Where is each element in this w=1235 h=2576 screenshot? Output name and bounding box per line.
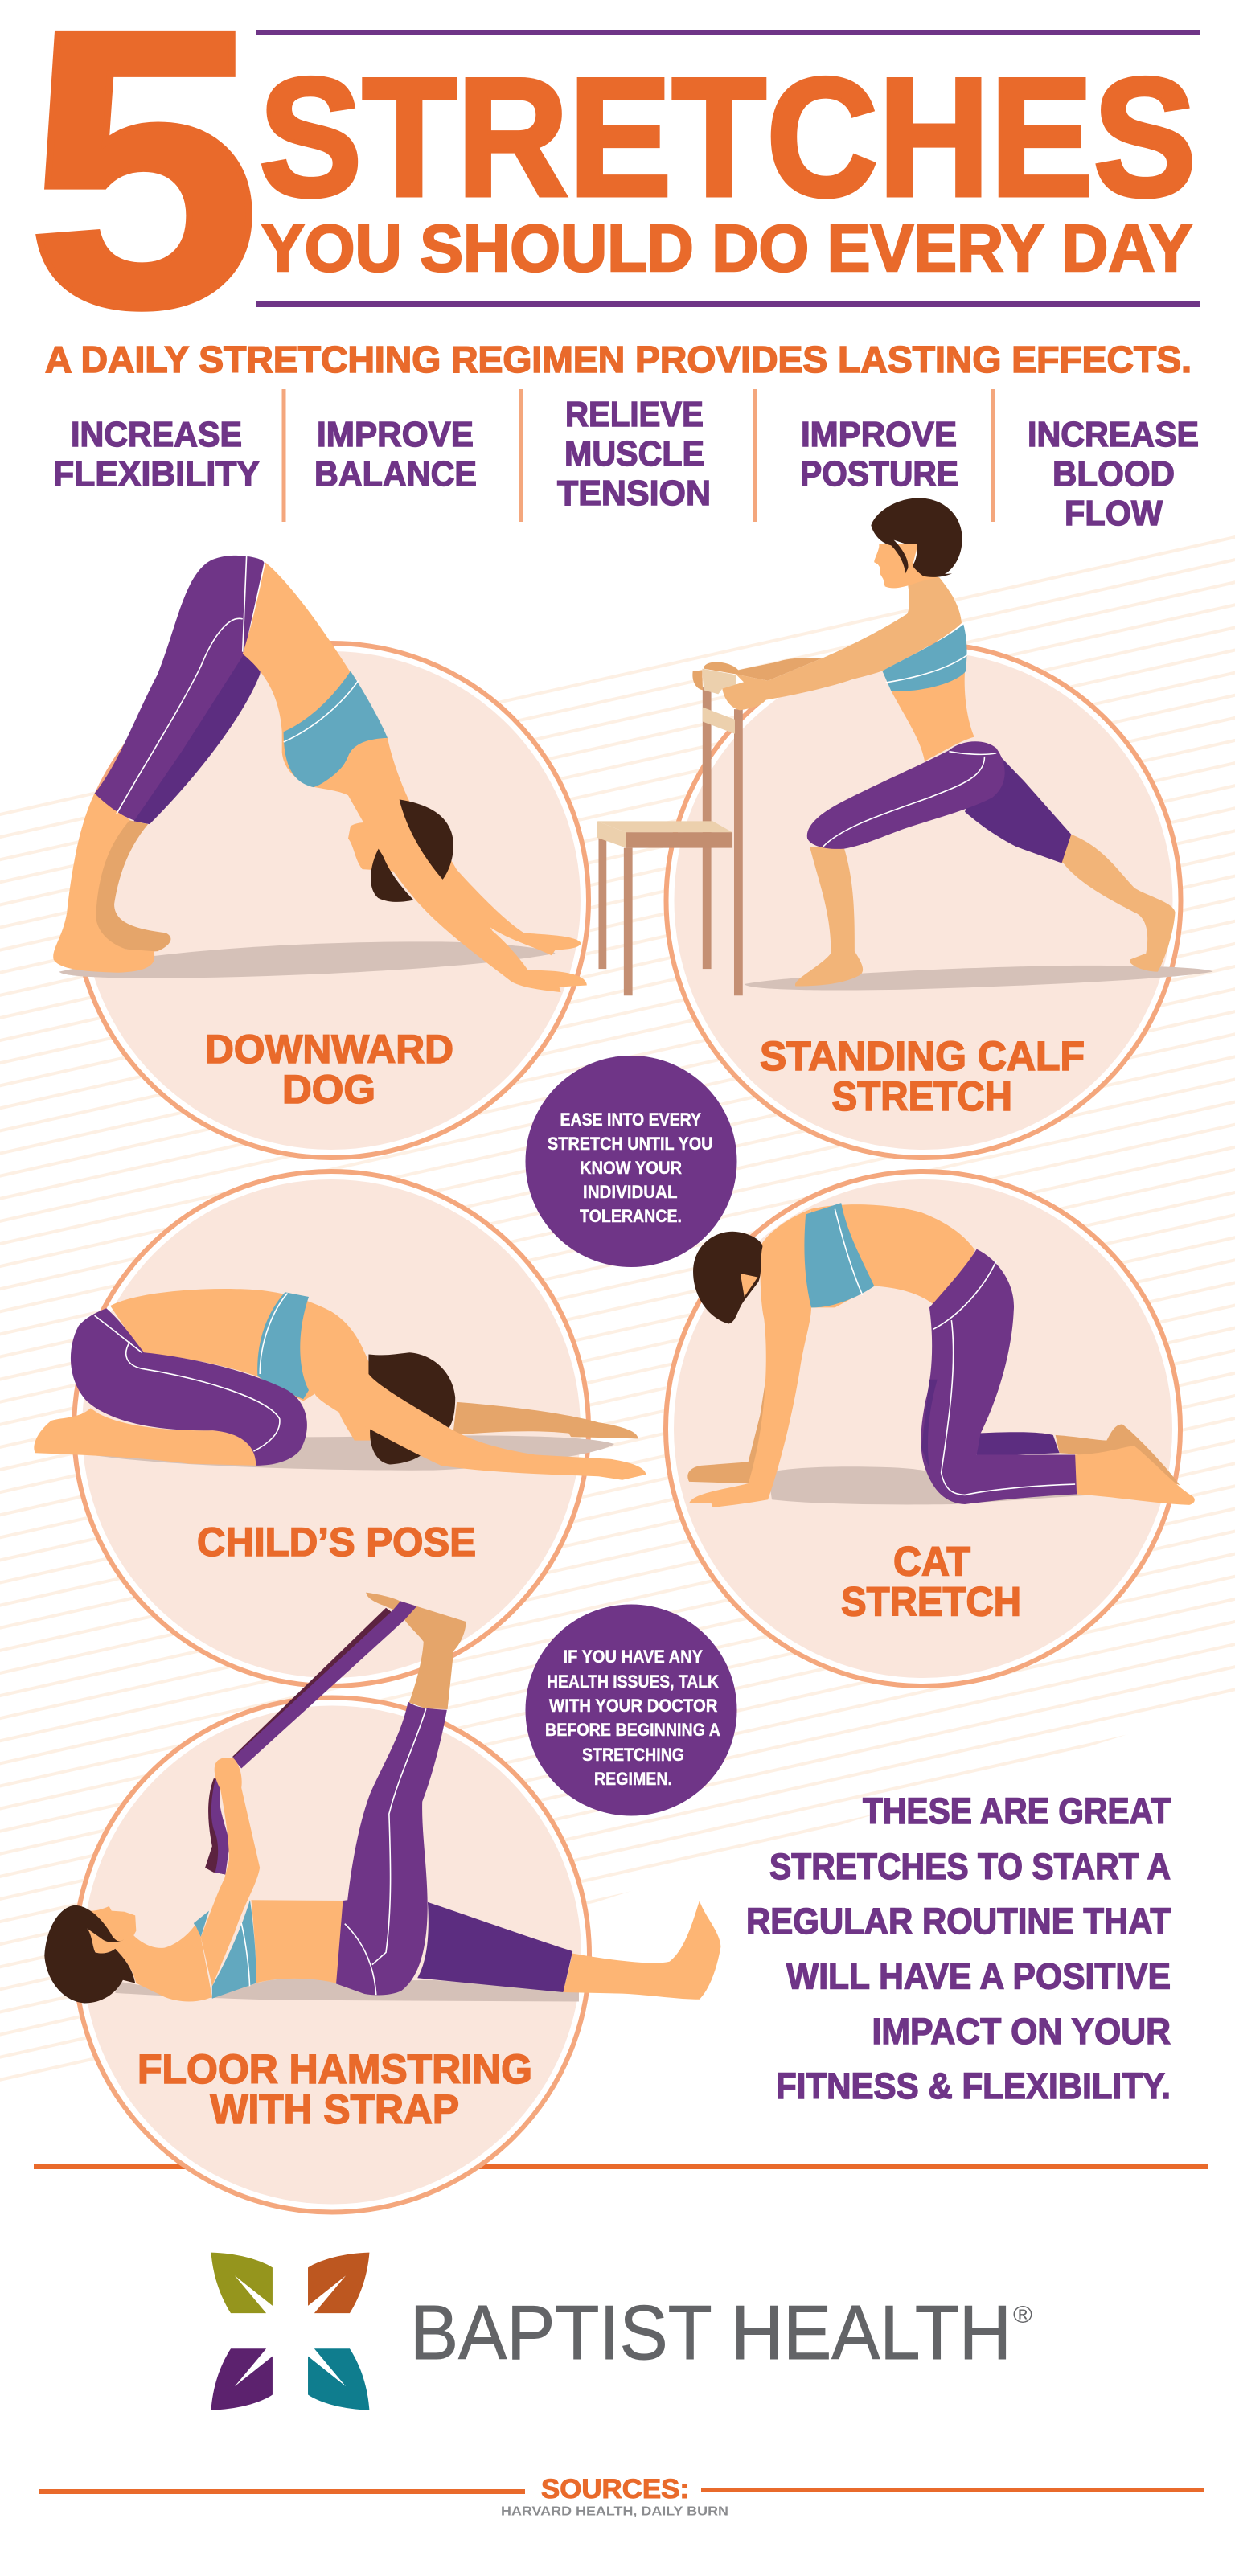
benefit: improve balance: IMPROVE bbox=[317, 415, 474, 454]
label: downward dog: DOG bbox=[282, 1067, 375, 1112]
petal: teal bbox=[308, 2348, 369, 2410]
callout: ease into every stretch: INDIVIDUAL bbox=[583, 1182, 677, 1202]
benefit: relieve muscle tension: MUSCLE bbox=[564, 434, 704, 474]
label: cat stretch: STRETCH bbox=[841, 1579, 1021, 1624]
figure: cat stretch bbox=[687, 1203, 1195, 1507]
benefit: increase flexibility: FLEXIBILITY bbox=[53, 454, 260, 494]
bottom rule bbox=[256, 301, 1200, 307]
petal: rust bbox=[308, 2253, 369, 2313]
logo wordmark: BAPTIST HEALTH bbox=[410, 2290, 1011, 2376]
figure: floor hamstring with strap bbox=[44, 1593, 720, 2003]
figure: standing calf stretch bbox=[692, 498, 1213, 991]
label: floor hamstring with strap: WITH STRAP bbox=[211, 2086, 459, 2132]
callout: talk with your doctor: STRETCHING bbox=[582, 1745, 684, 1765]
label: cat stretch: CAT bbox=[893, 1539, 970, 1584]
circle: floor hamstring bbox=[75, 1698, 589, 2213]
figure: chair bbox=[597, 687, 743, 995]
circle: standing calf stretch bbox=[666, 643, 1180, 1158]
figure: downward dog bbox=[53, 556, 587, 992]
callout: ease into every stretch: EASE INTO EVERY bbox=[560, 1110, 701, 1130]
closing paragraph: STRETCHES TO START A bbox=[769, 1846, 1171, 1887]
benefit: improve posture: POSTURE bbox=[800, 454, 958, 494]
benefit: relieve muscle tension: TENSION bbox=[557, 474, 711, 513]
closing paragraph: FITNESS & FLEXIBILITY. bbox=[776, 2065, 1171, 2106]
benefit: increase blood flow: BLOOD bbox=[1052, 454, 1175, 494]
label: standing calf stretch: STANDING CALF bbox=[760, 1033, 1085, 1079]
benefit: relieve muscle tension bbox=[557, 395, 711, 513]
closing paragraph: THESE ARE GREAT bbox=[863, 1790, 1171, 1832]
callout: ease into every stretch bbox=[526, 1056, 736, 1267]
callout: ease into every stretch: KNOW YOUR bbox=[580, 1158, 682, 1178]
label: standing calf stretch: STRETCH bbox=[831, 1073, 1012, 1119]
sources list: HARVARD HEALTH, DAILY BURN bbox=[501, 2505, 728, 2518]
benefit: increase flexibility: INCREASE bbox=[71, 415, 242, 454]
figure: child's pose bbox=[34, 1289, 646, 1480]
closing paragraph: IMPACT ON YOUR bbox=[872, 2011, 1171, 2052]
title bbox=[27, 0, 1200, 388]
benefit: improve balance: BALANCE bbox=[314, 454, 477, 494]
label: floor hamstring with strap bbox=[137, 2046, 532, 2132]
benefit: increase flexibility bbox=[53, 415, 260, 494]
benefit: improve posture: IMPROVE bbox=[801, 415, 957, 454]
circle: downward dog bbox=[74, 643, 589, 1158]
closing paragraph: WILL HAVE A POSITIVE bbox=[786, 1955, 1171, 1997]
petal: olive bbox=[211, 2253, 273, 2313]
label: downward dog bbox=[205, 1027, 453, 1112]
callout: talk with your doctor: WITH YOUR DOCTOR bbox=[549, 1696, 718, 1716]
benefits row bbox=[53, 395, 1199, 533]
callout: talk with your doctor: BEFORE BEGINNING A bbox=[545, 1720, 720, 1740]
benefit: increase blood flow bbox=[1028, 415, 1199, 533]
callout: talk with your doctor bbox=[526, 1605, 736, 1815]
top rule bbox=[256, 30, 1200, 35]
closing paragraph bbox=[746, 1790, 1171, 2106]
petal: purple bbox=[211, 2348, 273, 2410]
background stripes bbox=[0, 530, 1235, 2090]
callout: talk with your doctor: IF YOU HAVE ANY bbox=[563, 1647, 703, 1667]
label: floor hamstring with strap: FLOOR HAMSTRING bbox=[137, 2046, 532, 2092]
label: child's pose: CHILD’S POSE bbox=[197, 1520, 476, 1565]
benefit: improve posture bbox=[800, 415, 958, 494]
circle: child's pose bbox=[74, 1171, 589, 1686]
label: downward dog: DOWNWARD bbox=[205, 1027, 453, 1072]
circle: cat stretch bbox=[666, 1171, 1180, 1686]
logo wordmark: ® bbox=[1013, 2302, 1032, 2328]
sources heading: SOURCES: bbox=[541, 2474, 689, 2504]
closing paragraph: REGULAR ROUTINE THAT bbox=[746, 1901, 1171, 1942]
benefit: relieve muscle tension: RELIEVE bbox=[565, 395, 704, 434]
label: standing calf stretch bbox=[760, 1033, 1085, 1119]
callout: ease into every stretch: TOLERANCE. bbox=[580, 1206, 682, 1226]
callout: ease into every stretch: STRETCH UNTIL YOU bbox=[548, 1134, 712, 1154]
benefit: increase blood flow: INCREASE bbox=[1028, 415, 1199, 454]
callout: talk with your doctor: REGIMEN. bbox=[594, 1769, 672, 1789]
label: cat stretch bbox=[841, 1539, 1021, 1624]
benefit: increase blood flow: FLOW bbox=[1065, 494, 1163, 533]
title second line: YOU SHOULD DO EVERY DAY bbox=[261, 211, 1192, 285]
subheading: A DAILY STRETCHING REGIMEN PROVIDES LASTING EFFECTS. bbox=[45, 338, 1192, 380]
sources bbox=[39, 2474, 1204, 2518]
logo mark bbox=[211, 2253, 369, 2410]
benefit: improve balance bbox=[314, 415, 477, 494]
callout: talk with your doctor: HEALTH ISSUES, TALK bbox=[547, 1672, 719, 1692]
